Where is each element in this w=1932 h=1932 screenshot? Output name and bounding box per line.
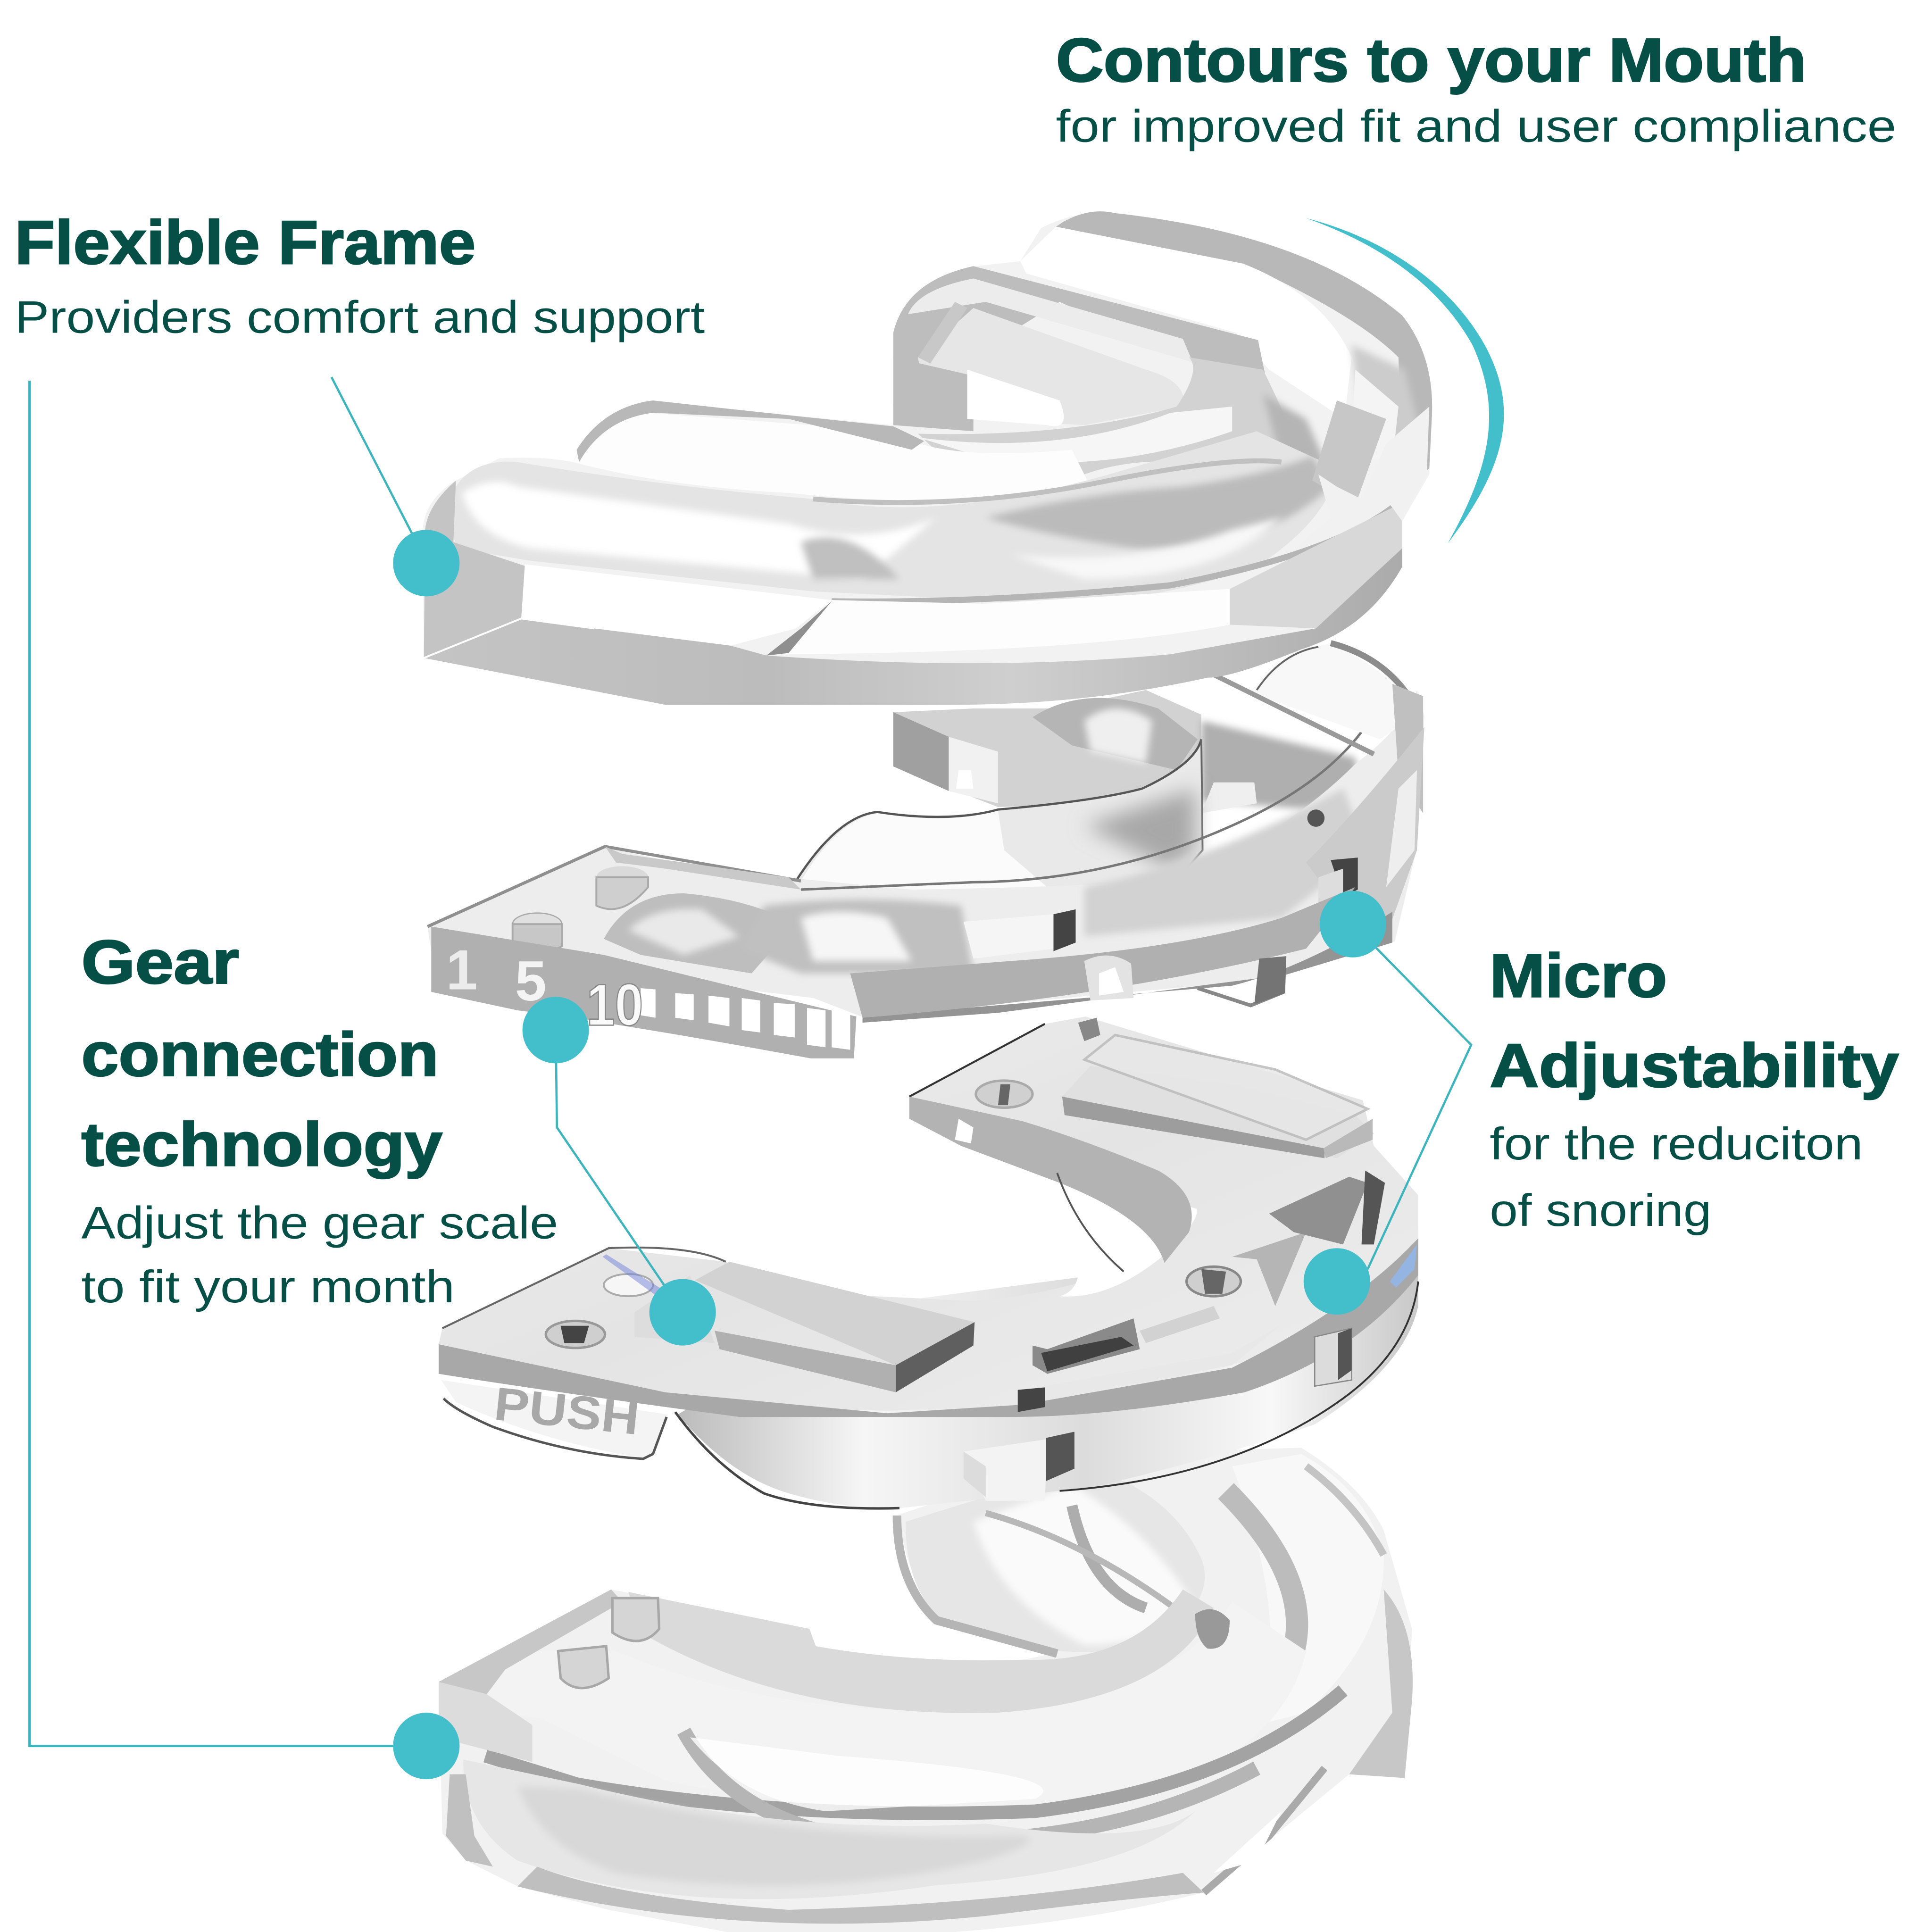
white front bands xyxy=(521,564,832,646)
side window xyxy=(964,914,1053,958)
heading: gear connection technology: Adjust the gear scale xyxy=(81,1198,558,1248)
palate back xyxy=(906,1466,1205,1652)
dot: lower plate left xyxy=(650,1279,716,1346)
back arm xyxy=(893,690,1201,807)
middle white lip xyxy=(573,413,1091,501)
small tab xyxy=(1198,988,1284,1006)
back inner arm xyxy=(893,266,1266,405)
callout line: gear connection xyxy=(556,1030,683,1312)
heading: gear connection technology: technology xyxy=(81,1110,442,1179)
bottom grey band xyxy=(424,548,1402,705)
right dome xyxy=(1250,643,1417,739)
plate side band xyxy=(439,1238,1418,1417)
plate top xyxy=(439,1016,1418,1411)
lower transparent wall xyxy=(678,1232,1418,1508)
heading: flexible frame: Providers comfort and support xyxy=(15,292,705,342)
heading: flexible frame xyxy=(15,208,705,342)
title: contours to your mouth xyxy=(1056,25,1896,151)
inner reflective body xyxy=(739,899,974,974)
heading: flexible frame: Flexible Frame xyxy=(15,208,475,277)
title: contours to your mouth: for improved fit and user compliance xyxy=(1056,101,1896,151)
silhouette xyxy=(423,213,1432,705)
posts xyxy=(596,866,648,888)
dot: bottom tray xyxy=(393,1713,459,1779)
layer 4: bottom tray xyxy=(439,1448,1413,1932)
inner mechanism xyxy=(1033,1318,1140,1374)
layer 3: lower gear plate xyxy=(439,1016,1418,1508)
right side facets xyxy=(1312,400,1386,505)
outer rim lines xyxy=(832,508,1392,601)
right band xyxy=(1306,727,1424,936)
upper block xyxy=(1062,1066,1374,1158)
heading: micro adjustability xyxy=(1490,941,1899,1236)
dot: gear scale xyxy=(523,997,589,1063)
heading: gear connection technology: connection xyxy=(81,1020,439,1089)
gear scale numbers xyxy=(446,939,643,1038)
front clear lip xyxy=(453,431,1337,604)
gear scale numbers: 1 xyxy=(446,939,477,1002)
corner block and posts xyxy=(439,1590,622,1694)
callout line: bottom tray bracket xyxy=(30,381,426,1746)
back outer grey band xyxy=(1056,211,1432,493)
layer 1: top tray xyxy=(423,211,1432,705)
upper arm edge xyxy=(909,1097,1192,1263)
plate top xyxy=(427,690,1424,1016)
pocket xyxy=(604,893,795,974)
heading: micro adjustability: for the reduciton xyxy=(1490,1119,1863,1169)
heading: micro adjustability: of snoring xyxy=(1490,1185,1711,1236)
heading: micro adjustability: Micro xyxy=(1490,941,1667,1010)
dot: flexible frame xyxy=(393,530,459,596)
gear scale numbers: 10 xyxy=(586,971,643,1038)
heading: micro adjustability: Adjustability xyxy=(1490,1031,1899,1100)
front band xyxy=(863,912,1392,1023)
callout line: contours arc xyxy=(1306,218,1504,543)
back white panel xyxy=(1020,227,1352,419)
inner U wall xyxy=(918,358,1306,487)
lower cup xyxy=(463,1759,1195,1899)
gear scale numbers: 5 xyxy=(515,949,547,1013)
heading: gear connection technology xyxy=(81,928,558,1312)
callout line: flexible frame xyxy=(332,377,416,542)
wall ribbon xyxy=(796,739,1203,899)
heading: gear connection technology: Gear xyxy=(81,928,239,997)
lower block xyxy=(695,1262,974,1365)
dot: upper plate right xyxy=(1320,891,1386,958)
heading: gear connection technology: to fit your month xyxy=(81,1262,455,1312)
layer 2: upper gear plate xyxy=(427,643,1424,1058)
upper white rim xyxy=(456,1602,1306,1809)
pull tab xyxy=(441,1380,668,1457)
callout line: micro adjustability xyxy=(1353,924,1471,1269)
left corner xyxy=(424,481,527,658)
gear scale xyxy=(431,926,857,1058)
dot: lower plate right xyxy=(1304,1248,1370,1315)
push label: PUSH xyxy=(492,1378,642,1445)
title: contours to your mouth: Contours to your Mouth xyxy=(1056,25,1807,94)
right outer bands xyxy=(1232,1454,1384,1725)
